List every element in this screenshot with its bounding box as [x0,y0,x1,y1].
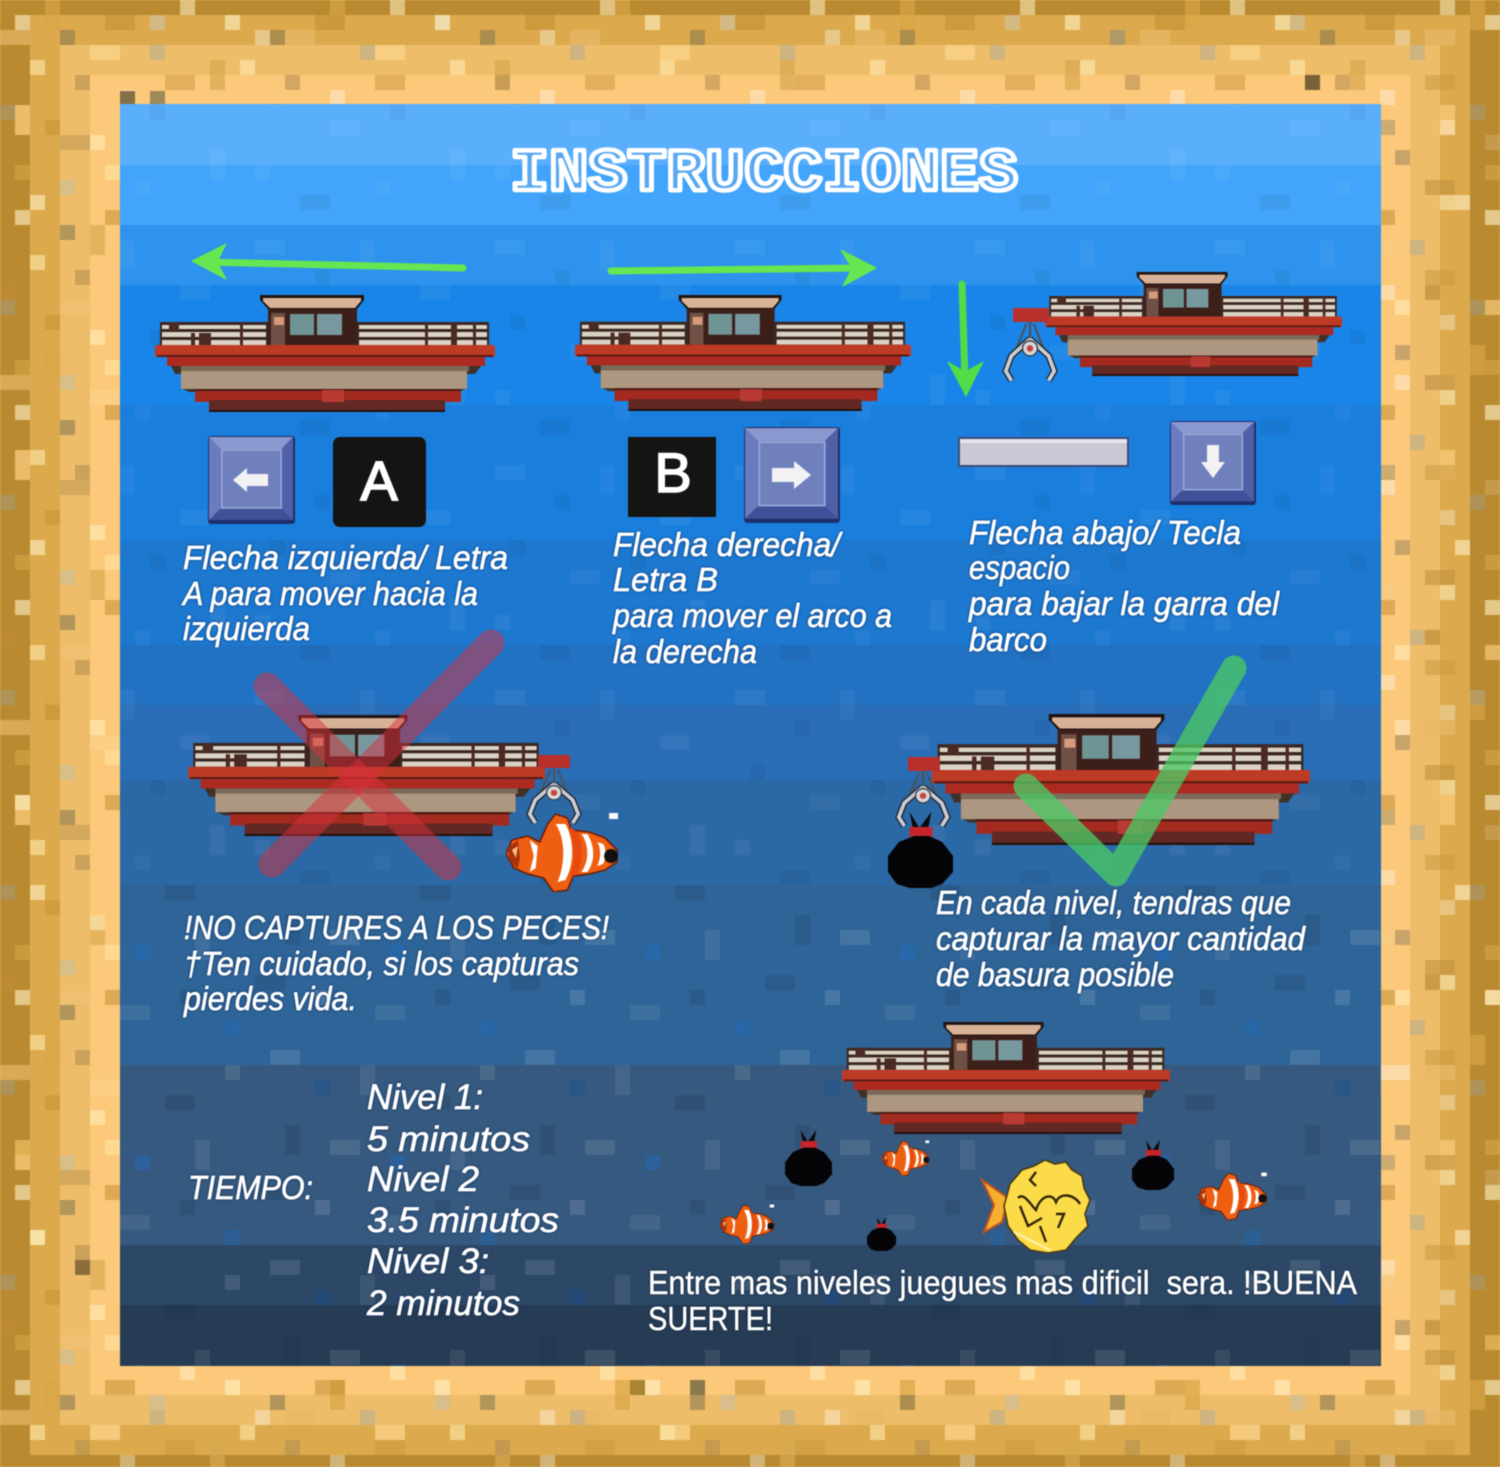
icon: trash bag 1 [785,1130,832,1186]
text: do not catch fish: †Ten cuidado, si los capturas [184,945,579,982]
text: right instruction: para mover el arco a [612,597,892,634]
text: left instruction [181,539,508,647]
icon: pufferfish [982,1160,1090,1253]
text: time per level [366,1078,559,1323]
key: letter A: A [360,449,398,512]
icon: trash bag 2 [1132,1140,1174,1190]
key: letter A [333,437,426,527]
text: right instruction: la derecha [613,633,757,670]
key: letter B [628,437,716,517]
text: closing message: SUERTE! [648,1300,773,1337]
icon: clownfish 2 [720,1204,774,1244]
panel: right catch, boat with trash bag [888,714,1310,888]
text: down instruction: espacio [969,549,1070,586]
text: do not catch fish: pierdes vida. [183,980,357,1017]
panel: wrong catch, boat with fish [188,715,618,892]
key: right arrow [744,427,840,523]
text: time label: TIEMPO: [188,1169,313,1206]
text: time per level: 2 minutos [366,1284,520,1323]
text: left instruction: Flecha izquierda/ Letra [183,539,508,576]
text: right instruction: Letra B [613,561,718,598]
icon: red cross [267,643,491,867]
icon: clownfish 1 [882,1140,929,1176]
text: right instruction [612,526,892,670]
key: left arrow [208,436,295,524]
icon: trash bag 3 [867,1217,896,1251]
boat: move left [155,295,495,412]
text: closing message: Entre mas niveles juegues mas dificil sera. !BUENA [648,1264,1357,1301]
boat: gameplay scene [842,1022,1170,1134]
text: down instruction: para bajar la garra del [968,585,1281,622]
icon: clownfish 3 [1198,1173,1267,1220]
title: INSTRUCCIONES [510,141,1018,209]
text: time per level: Nivel 1: [367,1078,483,1117]
text: do not catch fish: !NO CAPTURES A LOS PECES! [184,909,609,946]
key: down arrow [1170,421,1256,505]
text: catch trash: de basura posible [936,956,1174,993]
text: time per level: Nivel 3: [367,1242,489,1281]
key: space bar [958,437,1129,467]
text: right instruction: Flecha derecha/ [613,526,843,563]
text: closing message [648,1264,1357,1337]
arrow: left [192,244,463,279]
text: down instruction: barco [969,621,1047,658]
text: catch trash [936,884,1307,993]
arrow: down [948,284,983,396]
text: down instruction: Flecha abajo/ Tecla [969,514,1241,551]
key: letter B: B [654,441,692,504]
text: catch trash: En cada nivel, tendras que [936,884,1291,921]
text: do not catch fish [183,909,609,1017]
text: time per level: Nivel 2 [367,1160,479,1199]
boat: move right [575,295,911,411]
water background panel [120,104,1381,1366]
text: down instruction [968,514,1281,658]
text: catch trash: capturar la mayor cantidad [936,920,1307,957]
text: left instruction: A para mover hacia la [181,575,478,612]
text: time per level: 3.5 minutos [367,1201,559,1240]
arrow: right [611,250,876,286]
boat with lowered claw [1006,272,1342,380]
icon: green check [1026,668,1234,874]
text: time per level: 5 minutos [367,1120,530,1159]
text: left instruction: izquierda [183,610,310,647]
